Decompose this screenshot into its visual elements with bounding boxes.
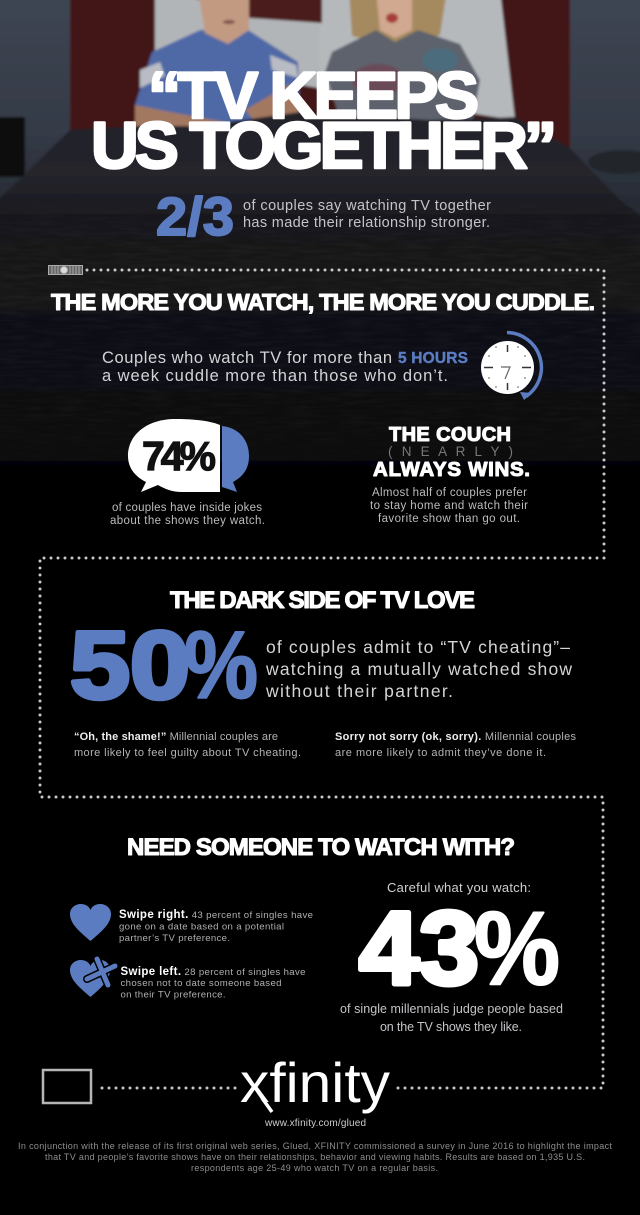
text: five hours cuddle bbox=[102, 349, 468, 385]
stat caption: of couples say watching TV together bbox=[243, 198, 491, 214]
text: tv cheating: of couples admit to “TV cheating”– bbox=[266, 637, 570, 657]
text: stay home bbox=[370, 487, 528, 525]
text: sorry not sorry: Sorry not sorry (ok, sorry). Millennial couples bbox=[335, 731, 576, 743]
text: swipe left: Swipe left. 28 percent of singles have bbox=[120, 966, 306, 978]
title: “TV KEEPS bbox=[148, 58, 479, 132]
text: five hours cuddle: a week cuddle more than those who don’t. bbox=[102, 367, 448, 385]
stat: 50 percent: % bbox=[184, 612, 258, 719]
heading: need someone: NEED SOMEONE TO WATCH WITH? bbox=[127, 834, 515, 861]
caption: inside jokes: about the shows they watch. bbox=[110, 515, 265, 527]
stat: 43 percent: % bbox=[474, 891, 560, 1007]
stat: 43 percent: 43 bbox=[359, 891, 479, 1007]
text: swipe right: Swipe right. 43 percent of singles have bbox=[119, 909, 313, 921]
title: US TOGETHER” bbox=[91, 108, 557, 182]
icon: remote control bbox=[48, 266, 82, 274]
text: single millennials bbox=[340, 1002, 563, 1034]
big fraction 2/3: 2/3 bbox=[156, 187, 234, 247]
text: tv cheating: without their partner. bbox=[265, 681, 453, 701]
text: five hours cuddle: Couples who watch TV for more than bbox=[102, 349, 392, 367]
heading: couch always wins: ( N E A R L Y ) bbox=[388, 444, 513, 459]
stat: two thirds of couples bbox=[156, 187, 491, 247]
text: stay home: Almost half of couples prefer bbox=[372, 487, 527, 499]
caption: inside jokes: of couples have inside jokes bbox=[112, 502, 262, 514]
caption: inside jokes bbox=[110, 502, 265, 527]
text: swipe right bbox=[119, 909, 313, 944]
text: careful what you watch: Careful what you watch: bbox=[387, 880, 531, 895]
heading: couch always wins: THE COUCH bbox=[389, 424, 511, 446]
heading: dark side: THE DARK SIDE OF TV LOVE bbox=[170, 587, 475, 614]
text: oh the shame bbox=[74, 731, 301, 759]
text: oh the shame: more likely to feel guilty about TV cheating. bbox=[74, 747, 301, 759]
text: five hours cuddle: 5 HOURS bbox=[398, 350, 468, 367]
icon: broken heart with bandage bbox=[70, 959, 115, 997]
icon: tv outline bbox=[43, 1070, 91, 1103]
text: stay home: to stay home and watch their bbox=[370, 500, 528, 512]
text: single millennials: of single millennials judge people based bbox=[340, 1002, 563, 1016]
text: sorry not sorry: are more likely to admit they’ve done it. bbox=[335, 747, 546, 759]
hero photo: couple in bed bbox=[0, 0, 640, 480]
text: swipe left bbox=[120, 966, 306, 1000]
stat: 50 percent: 50 bbox=[70, 612, 190, 719]
heading: couch always wins: ALWAYS WINS. bbox=[373, 458, 530, 481]
speech bubbles: 74 percent: 74% bbox=[142, 433, 216, 479]
footnote: In conjunction with the release of its first original web series, Glued, XFINITY commissioned a survey in June 2016 to highlight the impact bbox=[18, 1141, 612, 1151]
footnote bbox=[18, 1141, 612, 1173]
text: swipe right: gone on a date based on a potential bbox=[119, 922, 284, 932]
text: swipe right: partner’s TV preference. bbox=[119, 933, 230, 944]
logo: xfinity: xfinity bbox=[240, 1051, 390, 1114]
title bbox=[91, 58, 557, 182]
heading: more you watch: THE MORE YOU WATCH, THE MORE YOU CUDDLE. bbox=[51, 289, 595, 315]
icon: clock with arc bbox=[481, 332, 541, 400]
text: oh the shame: “Oh, the shame!” Millennial couples are bbox=[74, 731, 278, 743]
text: tv cheating bbox=[265, 637, 572, 701]
text: swipe left: on their TV preference. bbox=[120, 990, 226, 1000]
text: single millennials: on the TV shows they like. bbox=[380, 1020, 522, 1034]
dotted connector path bbox=[40, 270, 604, 1088]
footnote: respondents age 25-49 who watch TV on a regular basis. bbox=[191, 1163, 438, 1173]
stat: 50 percent bbox=[70, 612, 258, 719]
text: stay home: favorite show than go out. bbox=[378, 513, 520, 525]
text: swipe left: chosen not to date someone based bbox=[120, 978, 282, 989]
speech bubbles: 74 percent bbox=[128, 419, 249, 492]
footnote: that TV and people’s favorite shows have on their relationships, behavior and viewing habits. Results are based on 1,935 U.S. bbox=[45, 1152, 585, 1162]
stat: 43 percent bbox=[359, 891, 560, 1007]
stat caption bbox=[243, 198, 491, 231]
heading: couch always wins bbox=[373, 424, 530, 481]
link: website: www.xfinity.com/glued bbox=[264, 1118, 366, 1129]
icon: heart bbox=[70, 904, 111, 941]
text: sorry not sorry bbox=[335, 731, 576, 759]
text: tv cheating: watching a mutually watched show bbox=[265, 659, 572, 679]
stat caption: has made their relationship stronger. bbox=[243, 215, 490, 231]
